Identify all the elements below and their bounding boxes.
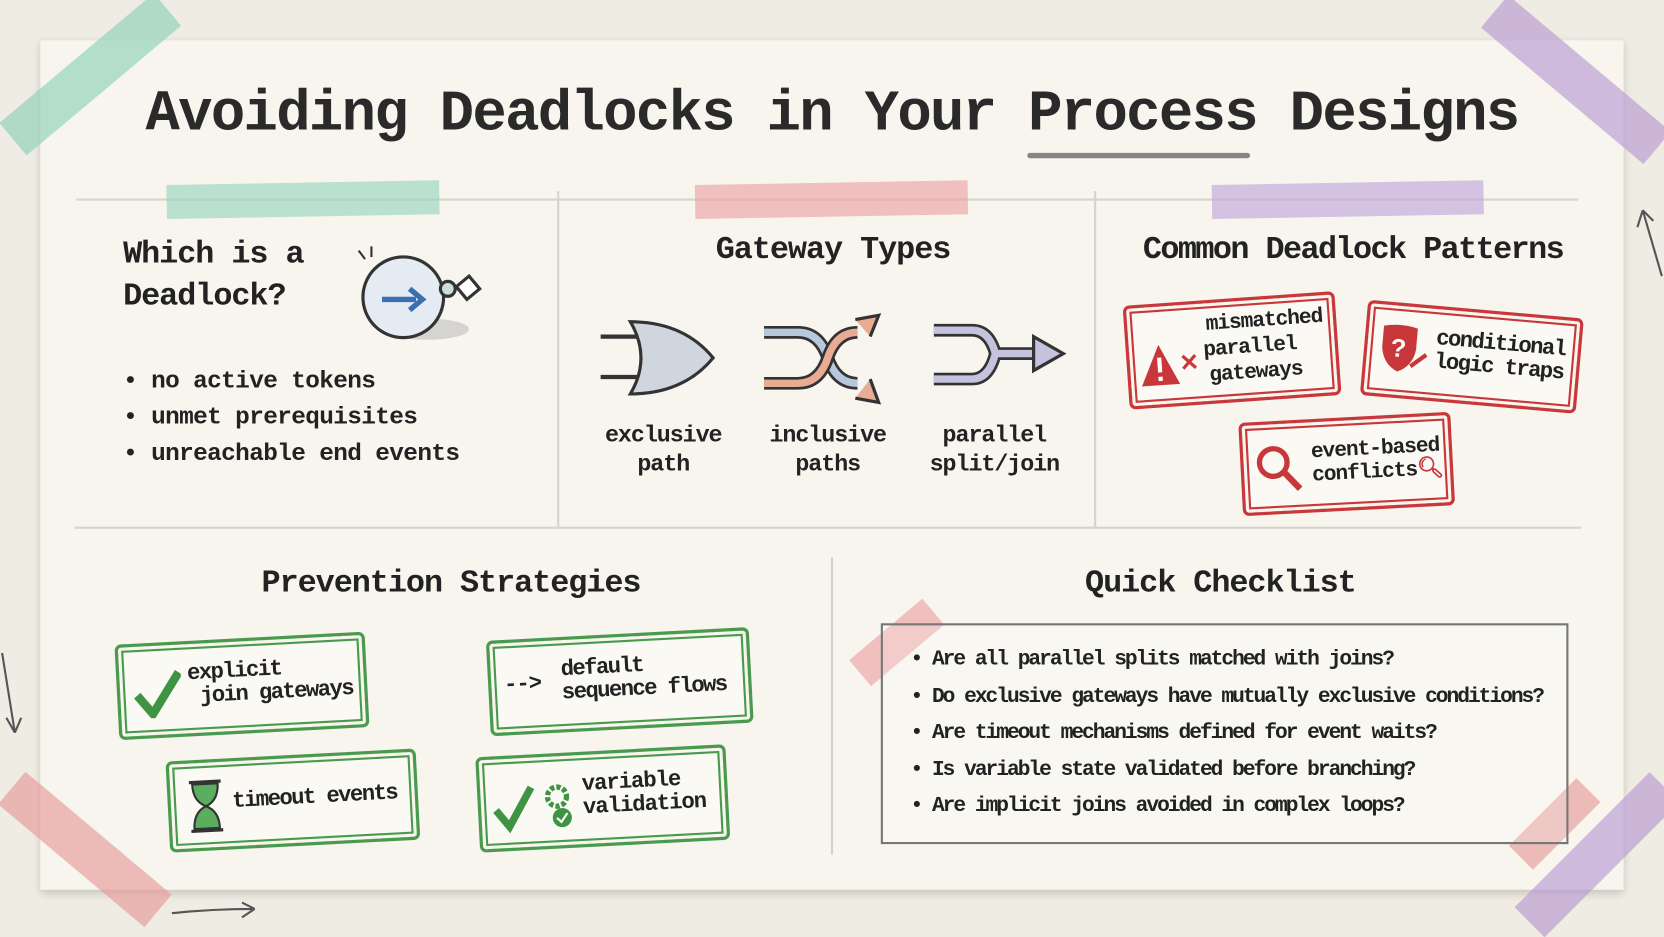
stamp: timeout events bbox=[165, 748, 420, 853]
panel: gateway types: paths bbox=[795, 451, 860, 478]
stamp: variable validation: variable bbox=[581, 768, 681, 797]
icon: inclusive bbox=[764, 313, 882, 404]
stamp: variable validation bbox=[475, 744, 730, 853]
heading: Prevention Strategies bbox=[262, 566, 640, 602]
labels: exclusive bbox=[605, 423, 722, 449]
stamp: explicit join: join gateways bbox=[199, 677, 354, 709]
panel: prevention strategies bbox=[114, 566, 754, 852]
stamp: event-based: conflicts🔍︎ bbox=[1312, 457, 1444, 488]
stamp: variable validation: validation bbox=[582, 790, 707, 821]
icon: exclusive bbox=[600, 320, 716, 396]
stamp: event-based bbox=[1238, 412, 1455, 516]
labels: path bbox=[637, 451, 689, 478]
stamp: conditional bbox=[1360, 300, 1584, 414]
stamp: default sequence flows: sequence flows bbox=[561, 673, 727, 706]
stamp: conditional: conditional bbox=[1435, 327, 1566, 363]
stamp: explicit join: explicit bbox=[187, 657, 282, 687]
stamp: mismatched: parallel bbox=[1203, 332, 1297, 363]
stamp: event-based: event-based bbox=[1310, 434, 1440, 465]
stamp: timeout events: timeout events bbox=[232, 781, 398, 814]
panel: gateway types: inclusive bbox=[769, 423, 886, 449]
bullet list bbox=[123, 367, 459, 467]
stamp: default sequence flows bbox=[486, 627, 754, 736]
heading: Deadlock? bbox=[123, 279, 285, 315]
stamp: default sequence flows: default bbox=[560, 654, 644, 683]
panel: gateway types bbox=[600, 233, 1066, 478]
checklist box: • Do exclusive gateways have mutually exclusive conditions? bbox=[911, 684, 1543, 709]
stamp: conditional: ? bbox=[1389, 334, 1407, 363]
stamp: mismatched: mismatched bbox=[1205, 305, 1323, 337]
bullet list: • unreachable end events bbox=[123, 440, 459, 467]
heading: Common Deadlock Patterns bbox=[1143, 233, 1563, 269]
heading: Which is a bbox=[123, 237, 304, 273]
grid lines bbox=[76, 199, 1578, 201]
panel: quick checklist bbox=[849, 566, 1568, 844]
stamp: mismatched bbox=[1123, 291, 1342, 410]
heading: Gateway Types bbox=[716, 233, 950, 269]
checklist box: • Is variable state validated before branching? bbox=[911, 758, 1414, 782]
bullet list: • no active tokens bbox=[123, 367, 375, 395]
heading bbox=[123, 237, 304, 315]
icon: parallel bbox=[934, 324, 1066, 386]
title: Avoiding Deadlocks in Your Process Designs bbox=[145, 83, 1518, 148]
panel: common deadlock patterns bbox=[1123, 233, 1584, 516]
tape corners bbox=[0, 0, 181, 155]
header tapes bbox=[166, 180, 440, 219]
panel: gateway types: parallel bbox=[943, 423, 1046, 449]
labels bbox=[605, 423, 722, 478]
checklist box: • Are implicit joins avoided in complex loops? bbox=[911, 794, 1404, 819]
stamp: default sequence flows: --> bbox=[504, 672, 542, 698]
checklist box bbox=[881, 623, 1568, 844]
icon: stuck token bbox=[358, 246, 482, 340]
bullet list: • unmet prerequisites bbox=[123, 403, 417, 431]
panel: which is a deadlock bbox=[123, 237, 482, 467]
heading: Quick Checklist bbox=[1085, 566, 1356, 602]
checklist box: • Are all parallel splits matched with joins? bbox=[911, 648, 1393, 672]
checklist box: • Are timeout mechanisms defined for event waits? bbox=[911, 721, 1436, 745]
stamp: explicit join bbox=[114, 632, 370, 740]
panel: gateway types: split/join bbox=[930, 451, 1059, 478]
stamp: conditional: logic traps bbox=[1433, 350, 1564, 386]
stamp: mismatched: gateways bbox=[1209, 357, 1303, 388]
